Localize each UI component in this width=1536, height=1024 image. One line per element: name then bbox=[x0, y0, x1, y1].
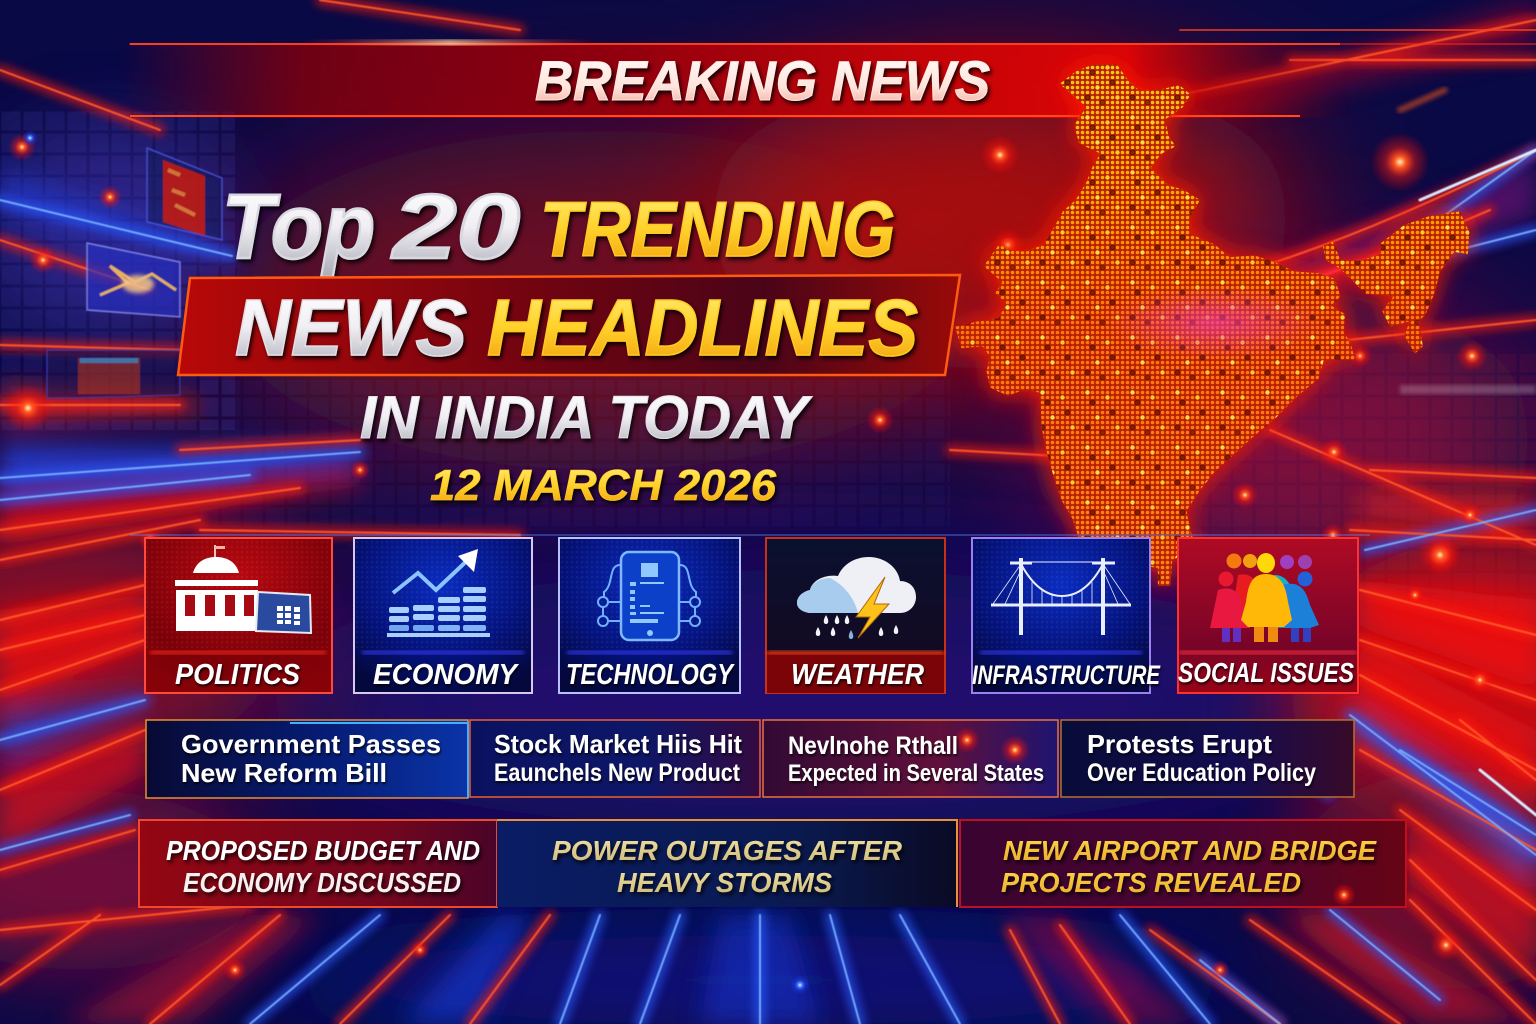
headline: protests: Protests Erupt bbox=[1087, 729, 1272, 759]
summary: budget: ECONOMY DISCUSSED bbox=[183, 867, 461, 898]
label: infrastructure: INFRASTRUCTURE bbox=[972, 660, 1161, 690]
label: technology: TECHNOLOGY bbox=[566, 659, 735, 691]
title ribbon with line 2: NEWS bbox=[235, 283, 467, 372]
panel: economy bbox=[354, 538, 532, 693]
headline: stock market: Stock Market Hiis Hit bbox=[494, 729, 742, 759]
headline: rainfall: Nevlnohe Rthall bbox=[788, 732, 958, 760]
headline: stock market bbox=[470, 720, 760, 797]
summary: power outages bbox=[497, 820, 957, 907]
title line 1: TRENDING bbox=[540, 185, 895, 273]
summary: airport and bridge: PROJECTS REVEALED bbox=[1001, 867, 1301, 898]
panel: technology bbox=[559, 538, 740, 693]
panel: line chart screen bbox=[87, 243, 180, 317]
title ribbon with line 2: HEADLINES bbox=[487, 283, 918, 372]
glow line above category tiles bbox=[130, 534, 1370, 536]
title ribbon with line 2 bbox=[178, 275, 960, 375]
label: weather: WEATHER bbox=[791, 659, 924, 691]
panel: weather bbox=[766, 538, 945, 693]
headline: rainfall: Expected in Several States bbox=[788, 760, 1044, 787]
label: social issues: SOCIAL ISSUES bbox=[1178, 657, 1354, 688]
icon: smartphone with circuits bbox=[598, 552, 700, 640]
banner heading: BREAKING NEWS bbox=[535, 49, 990, 112]
category tiles bbox=[145, 538, 1358, 693]
headline: protests bbox=[1061, 720, 1354, 797]
headline: protests: Over Education Policy bbox=[1087, 759, 1316, 787]
title line 1: 20 bbox=[391, 176, 520, 278]
title line 1: Top bbox=[222, 176, 375, 278]
title block bbox=[178, 176, 960, 510]
screen panels on the left wall bbox=[47, 148, 222, 398]
panel: data screen bbox=[47, 350, 180, 398]
panel: social issues bbox=[1178, 538, 1358, 693]
summary: power outages: POWER OUTAGES AFTER bbox=[552, 835, 903, 866]
panel: politics bbox=[145, 538, 332, 693]
map of India made of glowing dots bbox=[940, 50, 1500, 590]
headline: reform bill bbox=[146, 720, 468, 798]
headline: reform bill: Government Passes bbox=[181, 729, 441, 759]
summary boxes row bbox=[130, 817, 1410, 909]
icon: storm cloud bbox=[797, 557, 916, 639]
icon: rising chart bbox=[387, 549, 490, 637]
summary: airport and bridge: NEW AIRPORT AND BRIDGE bbox=[1003, 835, 1377, 866]
label: politics: POLITICS bbox=[175, 659, 301, 691]
panel: infrastructure bbox=[972, 538, 1161, 693]
summary: power outages: HEAVY STORMS bbox=[617, 867, 832, 898]
summary: budget bbox=[139, 820, 497, 907]
headline: stock market: Eaunchels New Product bbox=[494, 759, 741, 787]
date: 12 MARCH 2026 bbox=[430, 461, 777, 510]
icon: ballot tablet bbox=[256, 592, 311, 633]
title line 1 bbox=[222, 176, 895, 278]
icon: government building bbox=[175, 545, 258, 631]
panel: red map screen bbox=[147, 148, 222, 240]
summary: budget: PROPOSED BUDGET AND bbox=[166, 835, 480, 866]
title line 3: IN INDIA TODAY bbox=[360, 384, 813, 451]
summary: airport and bridge bbox=[960, 820, 1406, 907]
icon: group of people bbox=[1210, 553, 1319, 642]
label: economy: ECONOMY bbox=[373, 659, 520, 691]
breaking news banner bbox=[120, 40, 1350, 118]
headline: reform bill: New Reform Bill bbox=[181, 758, 387, 788]
icon: suspension bridge bbox=[991, 558, 1131, 635]
headline: rainfall bbox=[763, 720, 1058, 797]
headline boxes row bbox=[146, 720, 1354, 798]
